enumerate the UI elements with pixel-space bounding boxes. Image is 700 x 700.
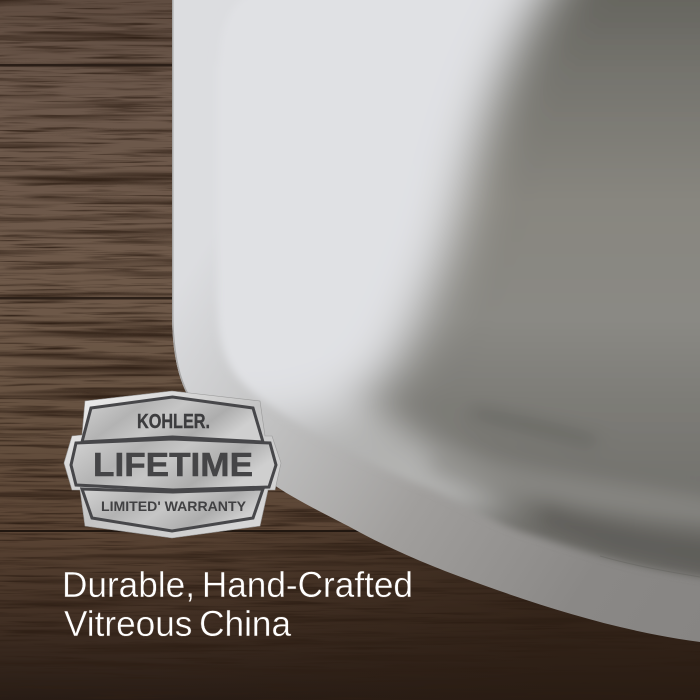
badge lifetime: LIFETIME bbox=[93, 446, 253, 483]
sink inner bowl bbox=[218, 0, 700, 580]
bowl dark base bbox=[347, 0, 700, 579]
rim crease line bbox=[600, 556, 700, 577]
badge bottom panel bbox=[82, 489, 263, 531]
bowl lighter band bbox=[432, 459, 700, 526]
bowl bottom shadow bbox=[540, 505, 700, 572]
caption bbox=[62, 564, 413, 644]
badge middle panel bbox=[71, 439, 276, 490]
badge plate bbox=[64, 391, 281, 538]
badge limited warranty: LIMITED' WARRANTY bbox=[101, 498, 247, 514]
badge brand: KOHLER. bbox=[137, 411, 210, 433]
warranty badge bbox=[64, 391, 281, 538]
sink rim edge bbox=[172, 0, 188, 396]
bowl dark streak bbox=[478, 410, 582, 440]
bowl light area bbox=[212, 0, 586, 436]
sink basin bbox=[172, 0, 700, 642]
sink rim bbox=[172, 0, 700, 642]
badge top panel bbox=[82, 397, 263, 442]
caption line 2: Vitreous China bbox=[64, 603, 292, 644]
bowl lower left haze bbox=[271, 388, 520, 524]
caption line 1: Durable, Hand-Crafted bbox=[62, 564, 413, 605]
